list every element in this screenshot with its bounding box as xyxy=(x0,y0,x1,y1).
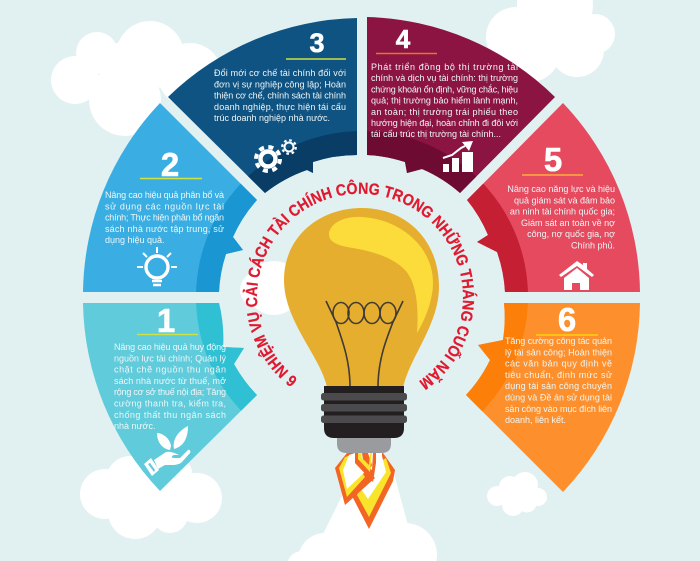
text block 2: chính; Thực hiện phân bổ ngân xyxy=(105,213,224,223)
text block 6: Tăng cường công tác quản xyxy=(505,336,612,346)
text block 2 xyxy=(105,190,224,245)
icon: gears xyxy=(256,140,296,171)
panel 5 xyxy=(467,103,640,292)
text block 6 xyxy=(505,336,612,425)
rocket flames xyxy=(335,453,395,529)
text block 5: Giám sát an toàn về nợ xyxy=(521,218,615,228)
number 4: 4 xyxy=(396,24,411,54)
cloud: top right xyxy=(486,0,615,82)
text block 4: tái cấu trúc thị trường tài chính... xyxy=(371,129,501,139)
text block 3: đơn vị sự nghiệp công lập; Hoàn xyxy=(214,79,346,89)
rocket smoke xyxy=(287,470,437,561)
icon: rising chart xyxy=(443,141,473,172)
text block 4 xyxy=(371,62,518,139)
panel 6 xyxy=(466,303,640,492)
filament xyxy=(326,301,403,387)
text block 1: nhà nước. xyxy=(114,421,155,431)
text block 5: an ninh tài chính quốc gia; xyxy=(510,207,615,217)
number 2: 2 xyxy=(161,146,179,183)
text block 2: sách nhà nước tập trung, sử xyxy=(105,224,224,234)
number 1: 1 xyxy=(157,302,175,339)
text block 4: quả; thị trường bảo hiểm lành mạnh, xyxy=(371,96,518,106)
number 3: 3 xyxy=(309,28,325,58)
text block 1: Nâng cao hiệu quả huy động xyxy=(114,342,226,352)
text block 6: tiêu chuẩn, định mức sử xyxy=(505,370,612,380)
text block 6: các văn bản quy định về xyxy=(505,359,612,369)
panel 4 xyxy=(367,17,555,193)
text block 4: Phát triển đồng bộ thị trường tài xyxy=(371,62,518,72)
text block 5 xyxy=(507,184,615,250)
cloud: behind ring xyxy=(240,261,301,315)
text block 5: Nâng cao năng lực và hiệu xyxy=(507,184,615,194)
text block 4: chính và dịch vụ tài chính: thị trường xyxy=(371,73,518,83)
panel 3 xyxy=(168,18,357,193)
text block 1: chặt chẽ nguồn thu ngân xyxy=(114,365,226,375)
icon: hand with leaves xyxy=(144,426,190,476)
text block 5: quả giám sát và đảm bảo xyxy=(514,195,615,205)
text block 3: thiện cơ chế, chính sách tài chính xyxy=(214,91,346,101)
text block 4: an toàn; thị trường trái phiếu theo xyxy=(371,107,518,117)
text block 6: sản công vào mục đích liên xyxy=(505,404,612,414)
cloud: top left xyxy=(51,21,222,136)
number 6: 6 xyxy=(558,301,576,338)
text block 2: sử dụng các nguồn lực tài xyxy=(105,201,224,211)
text block 1: chống thất thu ngân sách xyxy=(114,410,226,420)
cloud: bottom right xyxy=(487,472,547,516)
underlines for the numbers xyxy=(137,54,598,335)
number 5: 5 xyxy=(544,141,562,178)
text block 4: chứng khoán ổn định, vững chắc, hiệu xyxy=(371,84,518,94)
icon: house xyxy=(559,261,594,290)
text block 1: nguồn lực tài chính; Quản lý xyxy=(114,353,226,363)
text block 5: công, nợ quốc gia, nợ xyxy=(527,229,615,239)
text block 4: hướng hiện đại, hoàn chỉnh đi đôi với xyxy=(371,118,518,128)
text block 2: dụng hiệu quả. xyxy=(105,235,165,245)
text block 1: sách nhà nước từ thuế, mở xyxy=(114,376,226,386)
text block 6: dụng tài sản công chuyên xyxy=(505,381,612,391)
text block 5: Chính phủ. xyxy=(571,240,615,250)
text block 3: trúc doanh nghiệp nhà nước. xyxy=(214,113,330,123)
text block 1: rộng cơ sở thuế nội địa; Tăng xyxy=(114,387,226,397)
panel 1 xyxy=(83,303,257,491)
text block 3: Đổi mới cơ chế tài chính đối với xyxy=(214,68,346,78)
text block 6: lý tài sản công; Hoàn thiện xyxy=(505,347,612,357)
text block 1: cường thanh tra, kiểm tra, xyxy=(114,398,226,408)
bulb highlight xyxy=(329,217,433,333)
light bulb xyxy=(284,208,439,453)
text block 3 xyxy=(214,68,346,123)
text block 1 xyxy=(114,342,226,431)
text block 6: dùng và Đề án sử dụng tài xyxy=(505,392,612,402)
text block 2: Nâng cao hiệu quả phân bổ và xyxy=(105,190,224,200)
cloud: bottom left xyxy=(80,450,222,539)
text block 3: doanh nghiệp, thực hiện tái cấu xyxy=(214,102,346,112)
icon: light bulb xyxy=(137,247,177,285)
text block 6: doanh, liên kết. xyxy=(505,415,566,425)
bulb screw base xyxy=(321,386,407,453)
curved title: 6 NHIỆM VỤ CẢI CÁCH TÀI CHÍNH CÔNG TRONG NHỮNG THÁNG CUỐI NĂM xyxy=(242,180,478,390)
panel 2 xyxy=(83,103,257,292)
